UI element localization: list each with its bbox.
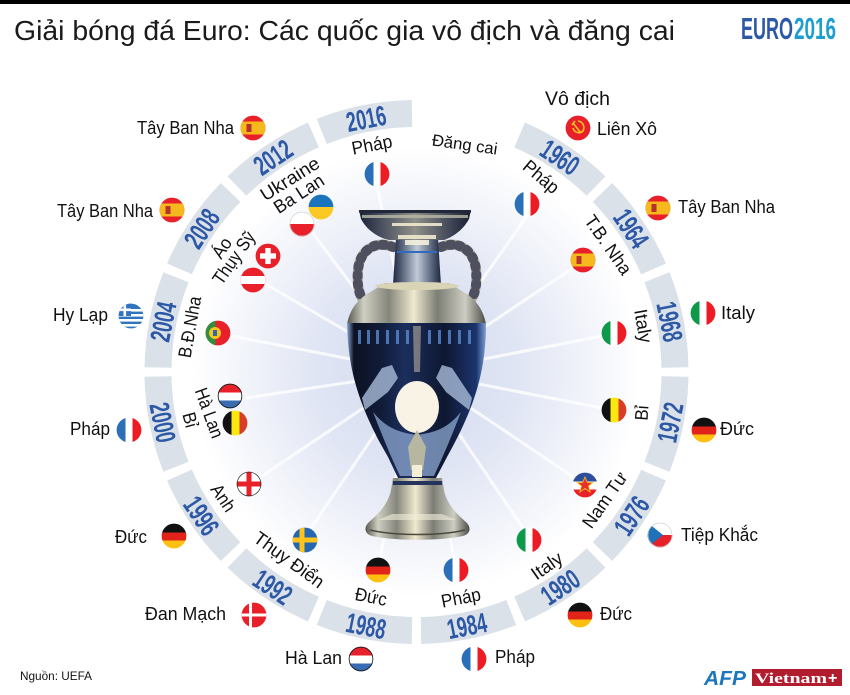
body reflections — [362, 365, 398, 410]
1984 band: 1984 — [444, 607, 490, 645]
trophy — [347, 210, 486, 540]
host: Bỉ 1972: Bỉ — [631, 405, 652, 421]
title: Giải bóng đá Euro: Các quốc gia vô địch và đăng cai — [14, 15, 675, 46]
winner: Đức 1996: Đức — [115, 526, 147, 547]
label: Vô địch: Vô địch — [545, 88, 610, 110]
winner flag: Tiệp Khắc — [648, 522, 672, 548]
host flag: Bồ Đào Nha — [206, 320, 230, 346]
body flutes — [358, 330, 471, 344]
host flag: Bỉ 1972 — [602, 398, 626, 422]
2012 band: 2012 — [248, 134, 298, 182]
winner: Tây Ban Nha 2008: Tây Ban Nha — [57, 200, 154, 221]
neck — [393, 238, 441, 285]
logo: AFP: AFP — [703, 668, 747, 690]
winner flag: Đức 1972 — [692, 418, 716, 442]
winner: Liên Xô: Liên Xô — [597, 118, 657, 139]
host: Hà Lan 2000: Hà Lan — [191, 385, 228, 441]
host flag: Hà Lan 2000 — [218, 384, 242, 408]
1980 band — [520, 545, 596, 622]
1976 band: 1976 — [608, 491, 656, 541]
host flag: Thụy Điển — [292, 528, 318, 552]
source note: Nguồn: UEFA — [20, 669, 92, 683]
winner flag: Tây Ban Nha 2012 — [240, 116, 266, 140]
1964 band: 1964 — [607, 203, 655, 254]
top black bar — [0, 0, 850, 4]
cup rim — [359, 210, 471, 240]
1972 band — [651, 377, 690, 467]
host flag: Nam Tư — [572, 472, 598, 498]
1980 band: 1980 — [535, 563, 586, 611]
host flag: Ukraine — [308, 194, 334, 220]
white orb — [395, 381, 439, 433]
2000 band — [141, 377, 193, 467]
winner: Hà Lan: Hà Lan — [285, 647, 342, 668]
2012 band — [237, 122, 313, 199]
winner: Tiệp Khắc: Tiệp Khắc — [681, 524, 758, 545]
2004 band — [144, 277, 183, 367]
1988 band: 1988 — [343, 607, 389, 645]
1968 band — [640, 277, 692, 367]
winner flag: Đan Mạch — [242, 602, 266, 628]
2016 band: 2016 — [344, 100, 389, 138]
winner: Pháp 2000: Pháp — [70, 418, 110, 439]
host flag: Italy 1968 — [602, 320, 626, 346]
host: Anh: Anh — [207, 480, 240, 516]
1992 band: 1992 — [247, 563, 298, 611]
host: Thụy Sỹ: Thụy Sỹ — [208, 227, 260, 288]
1996 band: 1996 — [177, 491, 225, 541]
host flag: Áo — [240, 268, 266, 292]
host flag: Pháp 1984 — [444, 558, 468, 582]
2000 band: 2000 — [143, 400, 182, 445]
winner flag: Tây Ban Nha 1964 — [646, 196, 670, 220]
2008 band — [178, 186, 231, 276]
rays from trophy to host flags — [232, 186, 602, 558]
host flag: Thụy Sỹ — [256, 244, 280, 268]
host: Áo: Áo — [207, 233, 236, 262]
1988 band — [322, 607, 412, 645]
host: Đức 1988: Đức — [353, 583, 389, 610]
host: Ba Lan: Ba Lan — [270, 170, 328, 218]
base — [365, 478, 470, 540]
background glow — [192, 147, 642, 597]
host: Pháp 2016: Pháp — [350, 130, 394, 159]
2008 band: 2008 — [178, 203, 226, 254]
winner flag: Hà Lan — [348, 646, 374, 672]
body — [347, 323, 486, 478]
host: B.Đ.Nha: B.Đ.Nha — [174, 294, 205, 359]
2016 band — [322, 97, 412, 148]
host flag: Anh — [236, 472, 262, 496]
host: Nam Tư: Nam Tư — [578, 467, 632, 532]
shoulder — [347, 283, 486, 324]
winner: Italy: Italy — [721, 302, 756, 323]
winner flag: Hy Lạp — [118, 304, 144, 328]
host: Italy 1968: Italy — [630, 307, 657, 345]
winner flag: Liên Xô — [566, 116, 590, 140]
1992 band — [230, 558, 320, 611]
1976 band — [602, 468, 656, 558]
winner flag: Pháp 1984 — [462, 646, 486, 672]
label: Đăng cai: Đăng cai — [431, 132, 499, 159]
host flag: Pháp 1960 — [514, 192, 540, 216]
winner: Pháp 1984: Pháp — [495, 646, 535, 667]
winner flag: Italy — [690, 300, 716, 326]
winner: Hy Lạp: Hy Lạp — [53, 304, 108, 325]
winner: Tây Ban Nha 2012: Tây Ban Nha — [137, 117, 235, 138]
1984 band — [421, 596, 511, 647]
host: Thụy Điển: Thụy Điển — [250, 527, 329, 592]
host flag: Ba Lan — [290, 212, 314, 236]
logo: Vietnam+ — [752, 669, 842, 687]
winner flag: Pháp 2000 — [116, 418, 142, 442]
host: Pháp 1984: Pháp — [439, 583, 483, 612]
host: Italy 1980: Italy — [527, 547, 567, 584]
host flag: Italy 1980 — [516, 528, 542, 552]
1960 band — [513, 134, 603, 186]
host flag: Pháp 2016 — [364, 162, 390, 186]
host flag: Bỉ 2000 — [222, 410, 248, 436]
1968 band: 1968 — [650, 299, 689, 344]
winner: Đan Mạch: Đan Mạch — [145, 603, 226, 624]
logo: Euro 2016: EURO — [741, 11, 793, 46]
winner: Đức 1980: Đức — [600, 603, 632, 624]
host: Pháp 1960: Pháp — [519, 155, 564, 198]
host flag: T.B. Nha — [570, 248, 596, 272]
1996 band — [167, 475, 243, 552]
1960 band: 1960 — [535, 134, 585, 182]
1964 band — [590, 192, 666, 269]
logo: Vietnam+: Vietnam — [755, 671, 828, 687]
host: Bỉ 2000: Bỉ — [178, 410, 203, 430]
winner flag: Đức 1996 — [162, 524, 186, 548]
winner flag: Tây Ban Nha 2008 — [160, 198, 184, 222]
winner: Tây Ban Nha 1964: Tây Ban Nha — [678, 196, 776, 217]
host: Ukraine: Ukraine — [256, 152, 323, 205]
winner: Đức 1972: Đức — [720, 418, 754, 439]
logo: Vietnam+: + — [828, 670, 837, 687]
1972 band: 1972 — [651, 400, 690, 445]
2004 band: 2004 — [144, 299, 183, 344]
host: T.B. Nha: T.B. Nha — [580, 211, 637, 279]
host flag: Đức 1988 — [366, 558, 390, 582]
handles — [358, 245, 476, 300]
winner flag: Đức 1980 — [568, 602, 592, 628]
